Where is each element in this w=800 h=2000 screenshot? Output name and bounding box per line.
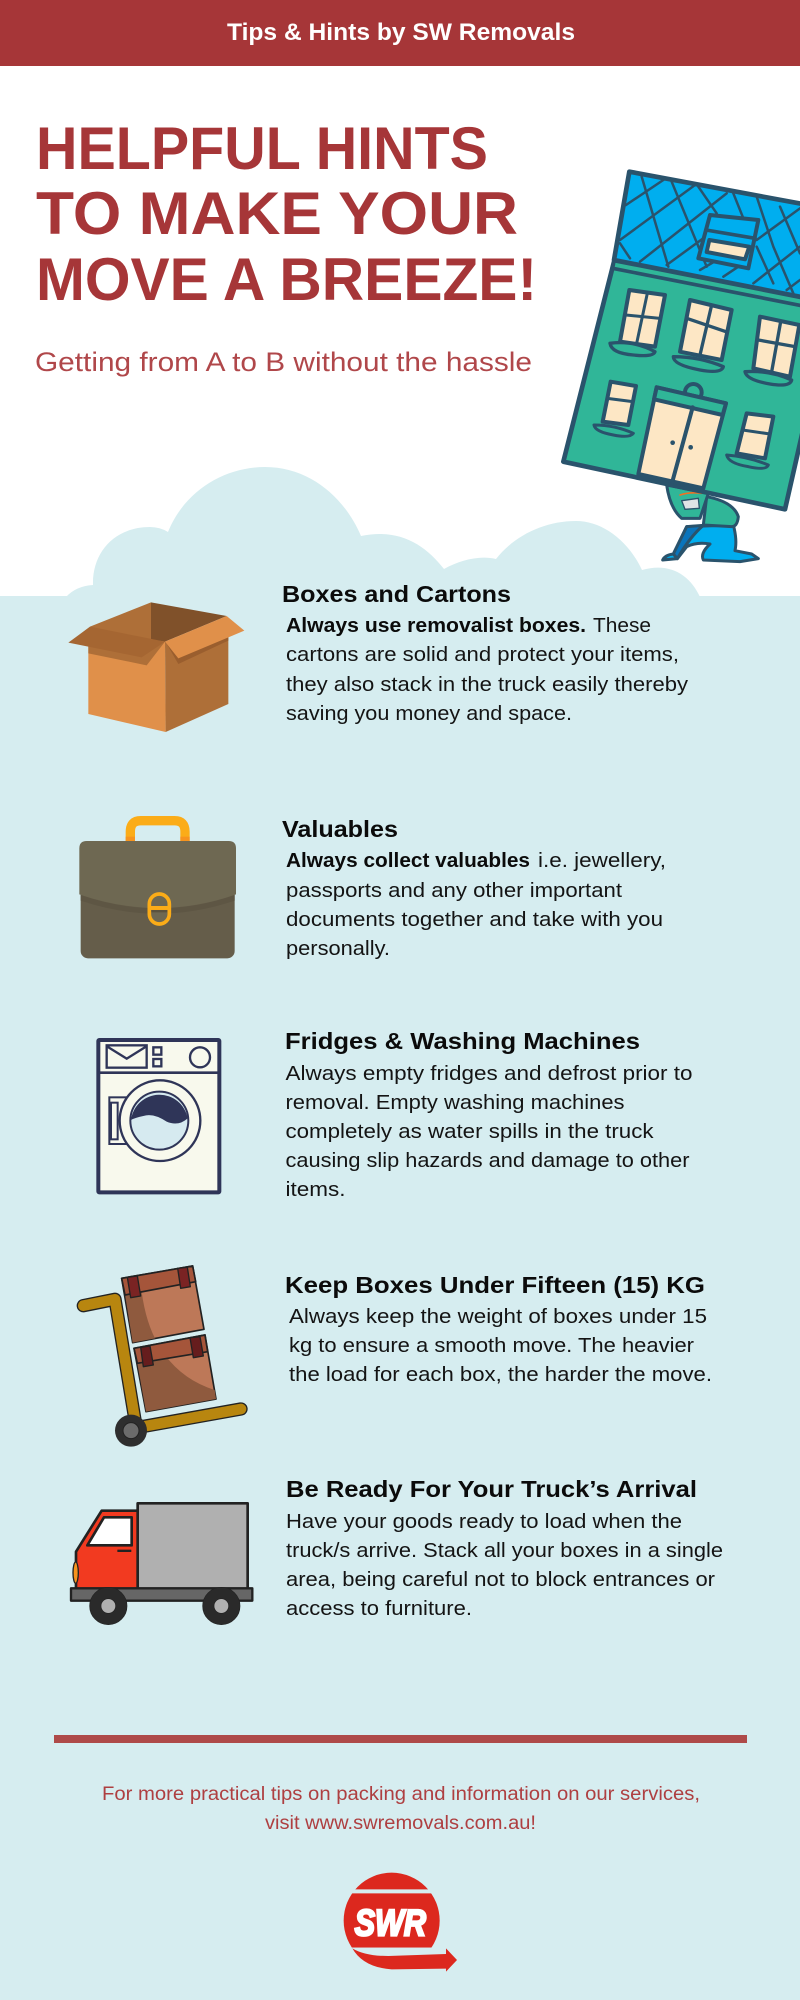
title: HELPFUL HINTS (36, 115, 488, 182)
icon: truck (71, 1503, 252, 1625)
text block: access to furniture. (286, 1598, 472, 1620)
heading: Be Ready For Your Truck’s Arrival (286, 1476, 697, 1502)
heading: Valuables (282, 816, 398, 842)
title (36, 115, 537, 313)
text block: Always keep the weight of boxes under 15 (289, 1306, 707, 1328)
icon: house roof (613, 172, 800, 307)
logo: SWR: SWR (355, 1902, 426, 1943)
text block: area, being careful not to block entrances or (286, 1569, 715, 1591)
text block: passports and any other important (286, 880, 622, 902)
text block: Always collect valuables (286, 850, 530, 872)
illustration: person carrying a house (563, 172, 800, 562)
text block: These (593, 615, 651, 637)
icon: trolley frame (83, 1299, 241, 1427)
divider bar (54, 1735, 747, 1743)
subtitle: Getting from A to B without the hassle (35, 347, 532, 377)
text block: Always use removalist boxes. (286, 615, 586, 637)
icon: trolley wheel (115, 1415, 147, 1447)
icon: house windows (594, 290, 799, 468)
text block: cartons are solid and protect your items, (286, 644, 679, 666)
icon: washing machine (98, 1040, 219, 1192)
panel: pale blue background with cloud (0, 467, 800, 2000)
title: TO MAKE YOUR (36, 180, 518, 247)
text block: truck/s arrive. Stack all your boxes in a single (286, 1540, 723, 1562)
text block: kg to ensure a smooth move. The heavier (289, 1335, 694, 1357)
footer text: visit www.swremovals.com.au! (265, 1813, 536, 1834)
footer text (102, 1784, 700, 1834)
text block (286, 850, 666, 960)
text block: personally. (286, 938, 390, 960)
logo: SWR (344, 1873, 457, 1972)
text block: items. (286, 1179, 346, 1201)
text block (286, 1511, 723, 1620)
icon: lower box (134, 1335, 216, 1412)
text block: the load for each box, the harder the move. (289, 1364, 712, 1386)
text block: Have your goods ready to load when the (286, 1511, 682, 1533)
icon: briefcase (79, 821, 236, 958)
text block (286, 615, 688, 725)
icon: hand trolley with boxes (83, 1266, 241, 1447)
title: MOVE A BREEZE! (36, 246, 537, 313)
heading: Keep Boxes Under Fifteen (15) KG (285, 1272, 705, 1298)
section: valuables (282, 816, 666, 960)
text block: removal. Empty washing machines (286, 1092, 624, 1114)
heading: Boxes and Cartons (282, 581, 511, 607)
text block: i.e. jewellery, (538, 850, 666, 872)
footer text: For more practical tips on packing and information on our services, (102, 1784, 700, 1805)
icon: upper box (122, 1266, 204, 1343)
icon: house door (638, 384, 726, 488)
section: be ready for truck arrival (286, 1476, 723, 1620)
icon: house walls (563, 262, 800, 509)
text block: Always empty fridges and defrost prior to (286, 1063, 692, 1085)
text block: completely as water spills in the truck (286, 1121, 655, 1143)
section: keep boxes under 15 kg (285, 1272, 712, 1386)
text block: causing slip hazards and damage to other (286, 1150, 690, 1172)
header banner (0, 0, 800, 66)
text block: saving you money and space. (286, 703, 572, 725)
heading: Fridges & Washing Machines (285, 1028, 640, 1054)
icon: cardboard box (68, 602, 244, 732)
section: boxes and cartons (282, 581, 688, 725)
text block: they also stack in the truck easily thereby (286, 674, 688, 696)
section: fridges and washing machines (285, 1028, 692, 1201)
icon: dormer window (698, 215, 758, 268)
header banner: Tips & Hints by SW Removals (227, 19, 575, 46)
icon: briefcase clasp (149, 894, 169, 924)
text block (289, 1306, 712, 1386)
text block (286, 1063, 692, 1201)
text block: documents together and take with you (286, 909, 663, 931)
icon: person (663, 485, 758, 562)
